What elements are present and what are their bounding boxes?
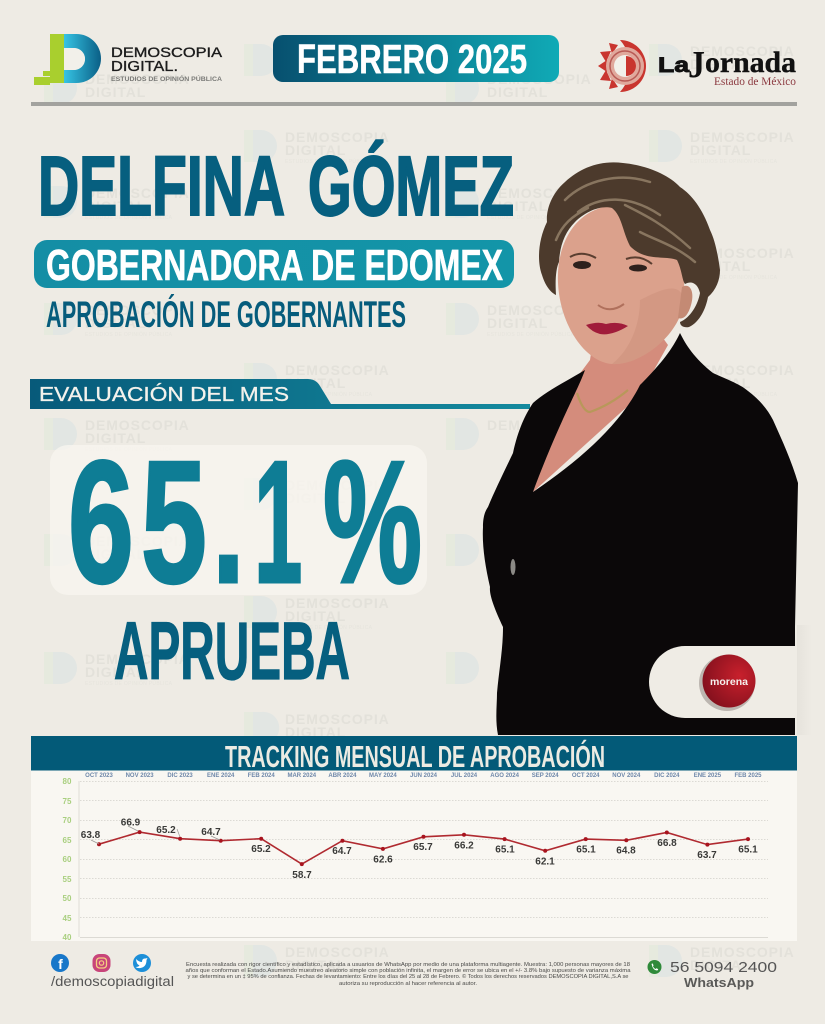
- background watermarks: DEMOSCOPIA: [85, 302, 190, 318]
- background watermarks: DEMOSCOPIA: [690, 245, 795, 261]
- legal text: y se determina en un ‡ 95% de confianza. Fechas de levantamiento: Entre los días del 25 al 28 de Febrero. © Todos los derechos reservados DEMOSCOPIA DIGITAL,S.A se: [188, 973, 629, 980]
- badge: morena: [649, 646, 797, 718]
- contact: whatsapp: WhatsApp: [684, 975, 754, 990]
- background watermarks: DEMOSCOPIA: [285, 129, 390, 145]
- legal text: Encuesta realizada con rigor científico y estadístico, aplicada a usuarios de WhatsApp por medio de una plataforma multiagente. Muestra: 1,000 personas mayores de 18: [186, 962, 630, 968]
- month labels: ABR 2024: [328, 773, 357, 779]
- month labels: FEB 2025: [734, 773, 762, 779]
- background watermarks: DIGITAL: [690, 258, 751, 274]
- value labels: 65.1: [576, 844, 596, 856]
- legal text: autoriza su reproducción al hacer referencia al autor.: [339, 981, 477, 987]
- background watermarks: DIGITAL: [85, 664, 146, 680]
- background watermarks: DIGITAL: [487, 315, 548, 331]
- background watermarks: DIGITAL: [487, 84, 548, 100]
- icon: facebook: f: [58, 956, 63, 972]
- banner: evaluación del mes: EVALUACIÓN DEL MES: [39, 383, 289, 406]
- logo: La Jornada: ornada: [705, 46, 796, 79]
- background watermarks: DIGITAL: [285, 608, 346, 624]
- month labels: MAY 2024: [369, 773, 397, 779]
- value labels: [81, 818, 758, 881]
- value labels: 62.6: [373, 854, 393, 866]
- portrait: Delfina Gómez: [483, 162, 798, 735]
- background watermarks: DEMOSCOPIA: [85, 71, 190, 87]
- background watermarks: DIGITAL: [690, 56, 751, 72]
- logo: La Jornada: La: [658, 54, 689, 77]
- logo: Demoscopia Digital: ESTUDIOS DE OPINIÓN PÚBLICA: [111, 75, 223, 83]
- background watermarks: DIGITAL: [690, 375, 751, 391]
- background watermarks: ESTUDIOS DE OPINIÓN PÚBLICA: [285, 158, 373, 165]
- logo: Demoscopia Digital: [34, 34, 223, 85]
- background watermarks: DIGITAL: [285, 490, 346, 506]
- value labels: 66.8: [657, 838, 677, 849]
- icon: twitter: [133, 954, 151, 972]
- month labels: NOV 2023: [126, 773, 154, 779]
- background watermarks: ESTUDIOS DE OPINIÓN PÚBLICA: [690, 158, 778, 165]
- background watermarks: DIGITAL: [285, 375, 346, 391]
- month labels: OCT 2023: [85, 773, 113, 779]
- y axis labels: 70: [63, 816, 72, 825]
- badge: morena: morena: [710, 676, 748, 688]
- value labels: 62.1: [535, 856, 555, 868]
- background watermarks: DIGITAL: [285, 142, 346, 158]
- panel: approval figure: 5: [141, 424, 207, 619]
- background watermarks: DIGITAL: [487, 198, 548, 214]
- background watermarks: DEMOSCOPIA: [285, 362, 390, 378]
- value labels: 63.7: [697, 850, 717, 861]
- value labels: 66.2: [454, 840, 474, 852]
- value labels: 65.1: [738, 844, 758, 856]
- background watermarks: DEMOSCOPIA: [690, 129, 795, 145]
- background watermarks: DEMOSCOPIA: [285, 43, 390, 59]
- background watermarks: ESTUDIOS DE OPINIÓN PÚBLICA: [690, 391, 778, 398]
- background watermarks: ESTUDIOS DE OPINIÓN PÚBLICA: [85, 446, 173, 453]
- icon: whatsapp: [648, 960, 662, 974]
- value labels: 65.7: [413, 842, 433, 853]
- date pill: FEBRERO 2025: [297, 36, 527, 82]
- background watermarks: ESTUDIOS DE OPINIÓN PÚBLICA: [85, 331, 173, 338]
- month labels: [85, 773, 762, 779]
- y axis labels: 80: [63, 777, 72, 786]
- y axis labels: 40: [63, 933, 72, 942]
- background watermarks: DIGITAL: [285, 724, 346, 740]
- value labels: 65.2: [251, 844, 271, 855]
- y axis labels: 60: [63, 855, 72, 864]
- background watermarks: DEMOSCOPIA: [85, 185, 190, 201]
- banner: evaluación del mes: [30, 379, 530, 409]
- legal text: [186, 962, 631, 987]
- panel: approval figure: [50, 424, 427, 620]
- month labels: SEP 2024: [532, 773, 559, 779]
- icon: instagram: [92, 954, 110, 972]
- month labels: MAR 2024: [287, 773, 317, 779]
- background watermarks: DIGITAL: [285, 56, 346, 72]
- logo: Demoscopia Digital: DEMOSCOPIA: [111, 44, 223, 60]
- background watermarks: DIGITAL: [85, 198, 146, 214]
- panel: approval figure: 1: [254, 425, 302, 620]
- logo: La Jornada: Estado de México: [714, 74, 796, 88]
- y axis labels: 50: [63, 894, 72, 903]
- y axis labels: 65: [63, 836, 72, 845]
- background watermarks: DIGITAL: [85, 546, 146, 562]
- background watermarks: DEMOSCOPIA: [285, 595, 390, 611]
- background watermarks: DIGITAL: [85, 315, 146, 331]
- y axis labels: 75: [63, 797, 72, 806]
- background watermarks: DIGITAL: [85, 84, 146, 100]
- value labels: 65.2: [156, 825, 176, 836]
- shadow beside portrait: [797, 625, 812, 735]
- month labels: FEB 2024: [248, 773, 275, 779]
- background watermarks: DEMOSCOPIA: [690, 43, 795, 59]
- panel: approval figure: .: [212, 424, 245, 619]
- month labels: ENE 2025: [694, 773, 722, 779]
- background watermarks: DEMOSCOPIA: [285, 944, 390, 960]
- subtitle pill: GOBERNADORA DE EDOMEX: [46, 241, 503, 290]
- title: name: DELFINA: [38, 139, 285, 233]
- month labels: AGO 2024: [490, 773, 520, 779]
- logo: Demoscopia Digital: DIGITAL.: [111, 58, 178, 75]
- background watermarks: DEMOSCOPIA: [85, 651, 190, 667]
- background watermarks: ESTUDIOS DE OPINIÓN PÚBLICA: [690, 274, 778, 281]
- month labels: JUL 2024: [451, 773, 478, 779]
- month labels: JUN 2024: [410, 773, 438, 779]
- background watermarks: ESTUDIOS DE OPINIÓN PÚBLICA: [487, 214, 575, 221]
- background watermarks: DEMOSCOPIA: [690, 362, 795, 378]
- contact: whatsapp: 56 5094 2400: [670, 959, 777, 976]
- month labels: ENE 2024: [207, 773, 235, 779]
- y axis labels: [63, 777, 72, 942]
- logo: La Jornada: J: [688, 44, 705, 86]
- background watermarks: DEMOSCOPIA: [487, 302, 592, 318]
- label: aprueba: APRUEBA: [114, 606, 350, 697]
- value labels: 64.8: [616, 846, 636, 856]
- legal text: años que conforman el Estado.Asumiendo muestreo aleatorio simple con población infinita, el margen de error se ubica en el +/- 3.8% bajo supuesto de varianza máxima: [186, 968, 631, 974]
- social icons: [51, 954, 174, 989]
- y axis labels: 55: [63, 875, 72, 884]
- background watermarks: ESTUDIOS DE OPINIÓN PÚBLICA: [285, 624, 373, 631]
- contact: whatsapp: [648, 959, 777, 990]
- value labels: 65.1: [495, 844, 515, 856]
- background watermarks: DEMOSCOPIA: [285, 477, 390, 493]
- background watermarks: DEMOSCOPIA: [85, 533, 190, 549]
- background watermarks: ESTUDIOS DE OPINIÓN PÚBLICA: [487, 331, 575, 338]
- background watermarks: ESTUDIOS DE OPINIÓN PÚBLICA: [85, 680, 173, 687]
- heading: tracking mensual: [31, 736, 797, 774]
- value labels: 64.7: [201, 827, 221, 838]
- heading: tracking mensual: TRACKING MENSUAL DE APROBACIÓN: [225, 738, 605, 774]
- background watermarks: ESTUDIOS DE OPINIÓN PÚBLICA: [285, 391, 373, 398]
- subheading: APROBACIÓN DE GOBERNANTES: [46, 293, 406, 335]
- approval line: [91, 826, 750, 866]
- value labels: 63.8: [81, 830, 101, 841]
- background watermarks: ESTUDIOS DE OPINIÓN PÚBLICA: [85, 214, 173, 221]
- background watermarks: DEMOSCOPIA: [690, 944, 795, 960]
- month labels: OCT 2024: [572, 773, 600, 779]
- month labels: DIC 2023: [167, 773, 193, 779]
- month labels: DIC 2024: [654, 773, 680, 779]
- background watermarks: DIGITAL: [690, 957, 751, 973]
- social handle: /demoscopiadigital: [51, 974, 174, 989]
- background watermarks: DEMOSCOPIA: [487, 417, 592, 433]
- background watermarks: DIGITAL: [285, 957, 346, 973]
- value labels: 64.7: [332, 846, 352, 857]
- background watermarks: DIGITAL: [690, 142, 751, 158]
- value labels: 66.9: [121, 818, 141, 828]
- background watermarks: DEMOSCOPIA: [487, 71, 592, 87]
- title: name: GÓMEZ: [308, 139, 514, 233]
- y axis labels: 45: [63, 914, 72, 923]
- background watermarks: DEMOSCOPIA: [85, 417, 190, 433]
- logo: La Jornada: [598, 40, 796, 92]
- value labels: 58.7: [292, 870, 312, 881]
- month labels: NOV 2024: [612, 773, 641, 779]
- panel: approval figure: %: [323, 425, 422, 619]
- background watermarks: DEMOSCOPIA: [487, 185, 592, 201]
- panel: approval figure: 6: [68, 424, 134, 619]
- background watermarks: DEMOSCOPIA: [285, 711, 390, 727]
- background watermarks: DIGITAL: [85, 430, 146, 446]
- panel: tracking chart: [31, 736, 797, 942]
